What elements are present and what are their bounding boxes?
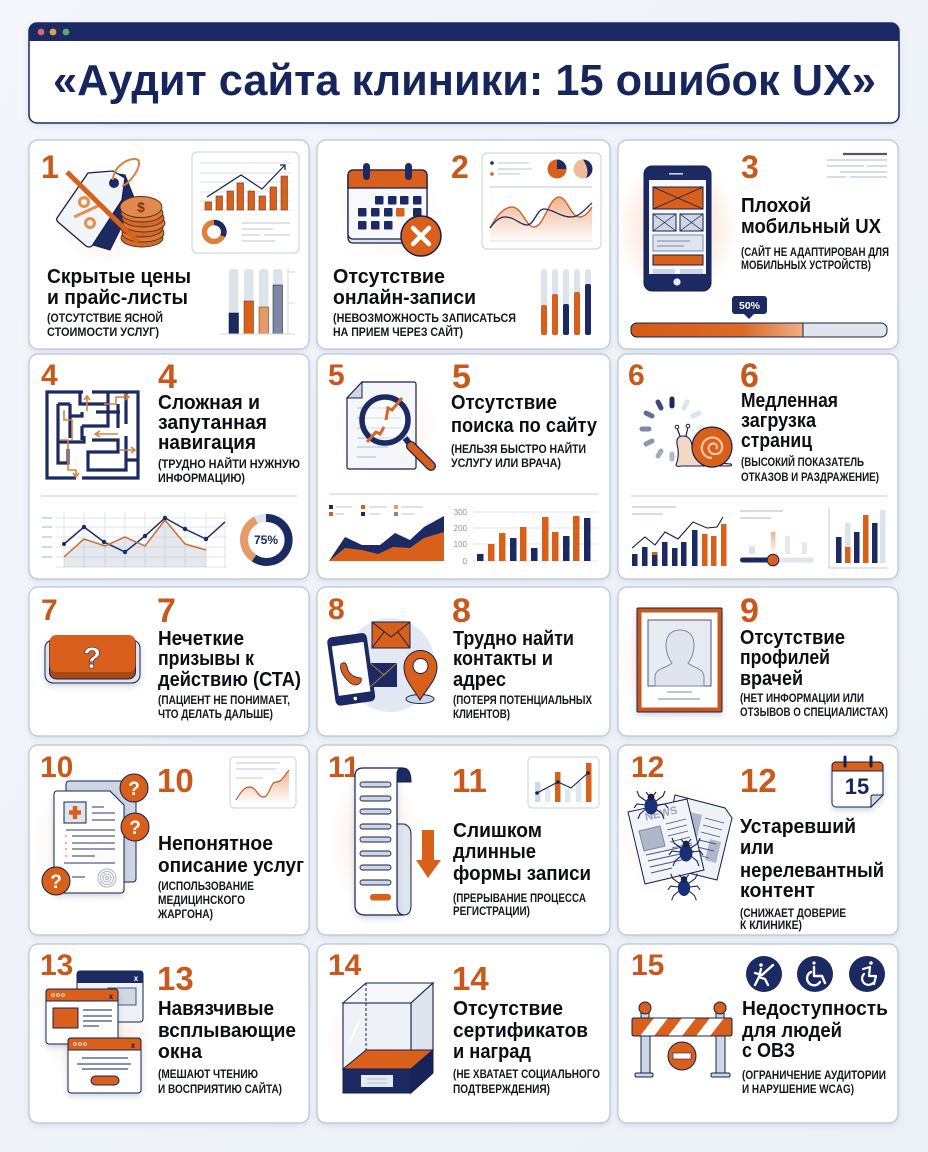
number 11 small: 11 [328, 751, 360, 784]
icon: accessibility badges [746, 956, 885, 992]
subtext: ИНФОРМАЦИЮ) [158, 471, 245, 485]
icon: medical document with question marks: ? [50, 872, 62, 893]
vertical bars chart [541, 269, 591, 335]
bar chart with axis: 300 [454, 508, 468, 517]
panel: 4 complex navigation [29, 354, 309, 579]
heading: всплывающие [158, 1020, 296, 1042]
heading: контакты и [453, 648, 553, 670]
heading: Отсутствие [451, 392, 557, 414]
heading: нерелевантный [740, 860, 884, 882]
subtext [741, 244, 889, 272]
subtext: ОТЗЫВОВ О СПЕЦИАЛИСТАХ) [740, 705, 888, 719]
heading: поиска по сайту [451, 415, 598, 437]
heading: страниц [741, 430, 813, 452]
heading: Трудно найти [453, 628, 574, 650]
subtext: К КЛИНИКЕ) [740, 918, 802, 932]
line chart [42, 512, 226, 568]
heading: Навязчивые [158, 998, 274, 1020]
panel: 5 no site search [317, 354, 610, 579]
icon: medical document with question marks [30, 774, 150, 900]
heading [158, 833, 304, 877]
header: browser window title banner [29, 23, 899, 123]
subtext: ЖАРГОНА) [157, 907, 213, 921]
subtext: ЧТО ДЕЛАТЬ ДАЛЬШЕ) [158, 707, 273, 721]
heading: действию (СТА) [158, 669, 301, 691]
progress bar 50% [631, 296, 887, 337]
title: «Аудит сайта клиники: 15 ошибок UX» [53, 56, 876, 105]
heading: с ОВЗ [742, 1040, 795, 1062]
mini dashboard: bar chart with donut [192, 152, 299, 253]
subtext: НА ПРИЕМ ЧЕРЕЗ САЙТ) [333, 324, 463, 339]
number 6 small: 6 [628, 359, 645, 392]
subtext: ПОДТВЕРЖДЕНИЯ) [453, 1082, 550, 1096]
heading: Сложная и [158, 392, 260, 414]
subtext [158, 456, 300, 485]
icon: long scroll form with arrow [330, 765, 441, 915]
panel: 14 no certificates [317, 944, 610, 1123]
icon: stacked popup windows: x [134, 974, 139, 983]
heading: длинные [453, 841, 536, 863]
icon: stacked popup windows [45, 971, 155, 1095]
icon: orange button with question mark: ? [83, 642, 101, 675]
number 5 small: 5 [328, 359, 345, 392]
subtext [740, 906, 846, 932]
icon: medical document with question marks: ? [129, 818, 141, 839]
heading [47, 266, 191, 309]
heading: окна [158, 1041, 203, 1063]
subtext [158, 693, 290, 721]
heading: Устаревший [740, 816, 856, 838]
subtext: (ОГРАНИЧЕНИЕ АУДИТОРИИ [742, 1068, 886, 1082]
heading: профилей [740, 647, 830, 669]
icon: newspapers with bugs [617, 782, 733, 900]
heading [740, 816, 884, 902]
panel: 3 poor mobile UX [615, 140, 898, 349]
icon: smartphone with wireframe [615, 156, 739, 300]
heading [741, 195, 882, 238]
legend [329, 505, 423, 516]
number 5 large: 5 [452, 358, 471, 396]
slider with bars [740, 511, 814, 566]
panel: 11 long booking forms [317, 745, 610, 935]
heading: формы записи [453, 863, 591, 885]
heading: Нечеткие [158, 628, 244, 650]
mini chart [528, 757, 599, 808]
mini bar chart [829, 507, 887, 568]
subtext: УСЛУГУ ИЛИ ВРАЧА) [451, 456, 561, 470]
subtext: (ИСПОЛЬЗОВАНИЕ [158, 879, 254, 893]
donut 75%: 75% [254, 533, 278, 547]
number 7 large: 7 [157, 592, 176, 630]
icon: calendar 15: 15 [845, 774, 869, 799]
number 10 large: 10 [157, 762, 194, 799]
number 1: 1 [41, 149, 59, 185]
heading: Непонятное [158, 833, 273, 855]
donut 75% [244, 518, 289, 562]
number 10 small: 10 [40, 751, 73, 784]
heading [740, 627, 845, 690]
heading [742, 998, 888, 1062]
heading: Скрытые цены [47, 266, 191, 288]
subtext: МЕДИЦИНСКОГО [158, 893, 245, 907]
heading: Плохой [741, 195, 811, 217]
subtext [451, 441, 586, 470]
subtext [157, 879, 254, 921]
icon: document with broken magnifier [333, 373, 437, 477]
number 12 large: 12 [740, 762, 777, 799]
heading: сертификатов [453, 1020, 588, 1042]
icon: empty portrait frame [615, 598, 722, 722]
number 3: 3 [741, 149, 759, 185]
heading [158, 392, 267, 454]
icon: price tags and coins [53, 159, 165, 267]
icon: orange button with question mark [45, 635, 140, 683]
text placeholder lines [827, 154, 887, 177]
bar chart with axis: 200 [454, 524, 468, 533]
heading: навигация [158, 432, 256, 454]
icon: stacked popup windows: x [109, 992, 114, 1001]
subtext: (ПРЕРЫВАНИЕ ПРОЦЕССА [453, 891, 586, 905]
bar chart with axis [454, 508, 598, 566]
subtext: (ТРУДНО НАЙТИ НУЖНУЮ [158, 456, 300, 471]
heading: запутанная [158, 412, 267, 434]
heading: контент [740, 880, 815, 902]
subtext: (ОТСУТСТВИЕ ЯСНОЙ [47, 310, 163, 325]
number 13 small: 13 [40, 949, 73, 982]
subtext: СТОИМОСТИ УСЛУГ) [47, 325, 159, 339]
number 14 small: 14 [328, 949, 362, 982]
number 12 small: 12 [631, 751, 664, 784]
heading [453, 998, 588, 1063]
subtext: И ВОСПРИЯТИЮ САЙТА) [158, 1081, 282, 1096]
heading [333, 266, 476, 309]
heading: Слишком [453, 820, 542, 842]
bar chart with axis: 0 [463, 557, 468, 566]
subtext [453, 693, 592, 721]
mini chart [230, 757, 296, 808]
progress bars chart [219, 268, 295, 334]
subtext: РЕГИСТРАЦИИ) [453, 904, 530, 918]
heading: для людей [742, 1020, 842, 1042]
icon: stacked popup windows: x [131, 1041, 136, 1050]
subtext [742, 1068, 886, 1096]
panel: 7 unclear CTA [29, 587, 309, 736]
subtext [741, 454, 879, 484]
subtext: (ПОТЕРЯ ПОТЕНЦИАЛЬНЫХ [453, 693, 592, 707]
number 14 large: 14 [452, 960, 489, 997]
icon: phone envelopes pin [327, 618, 437, 712]
mini bars with trend line [632, 507, 726, 566]
bar chart with axis: 100 [454, 540, 468, 549]
number 7 small: 7 [41, 594, 58, 627]
subtext [333, 311, 516, 339]
panel: 1 hidden prices [29, 140, 309, 349]
heading [453, 628, 574, 691]
subtext: (САЙТ НЕ АДАПТИРОВАН ДЛЯ [741, 244, 889, 259]
panel: 13 intrusive popups [29, 944, 309, 1123]
number 8 large: 8 [452, 592, 471, 630]
icon: empty display case [325, 983, 433, 1093]
mini dashboard: line chart and pies [482, 153, 601, 249]
panel: 6 slow loading [618, 354, 898, 579]
heading [158, 998, 296, 1063]
icon: price tags and coins: $ [137, 199, 145, 215]
panel: 15 inaccessibility [618, 944, 898, 1123]
heading: или [740, 837, 774, 859]
subtext: (НЕВОЗМОЖНОСТЬ ЗАПИСАТЬСЯ [333, 311, 516, 325]
heading: Медленная [741, 390, 838, 412]
heading: Отсутствие [453, 998, 563, 1020]
number 15: 15 [631, 949, 664, 982]
subtext [740, 691, 888, 719]
icon: newspapers with bugs: NEWS [644, 805, 679, 824]
number 11 large: 11 [452, 762, 487, 799]
number 13 large: 13 [157, 960, 194, 997]
heading: Отсутствие [740, 627, 845, 649]
icon: medical document with question marks: ? [128, 779, 140, 800]
heading [453, 820, 591, 885]
icon: maze with arrows [47, 392, 138, 478]
heading: загрузка [741, 410, 817, 432]
panel: 10 unclear service descriptions [29, 745, 309, 935]
subtext [453, 1067, 600, 1096]
heading: адрес [453, 669, 506, 691]
number 4 large: 4 [158, 358, 177, 396]
heading: врачей [740, 668, 803, 690]
subtext: (ПАЦИЕНТ НЕ ПОНИМАЕТ, [158, 693, 290, 707]
subtext: МОБИЛЬНЫХ УСТРОЙСТВ) [741, 257, 871, 272]
number 8 small: 8 [328, 593, 345, 626]
heading: Отсутствие [333, 266, 445, 288]
number 6 large: 6 [740, 357, 759, 395]
number 9: 9 [740, 592, 759, 630]
heading: и прайс-листы [47, 287, 188, 309]
subtext: (МЕШАЮТ ЧТЕНИЮ [158, 1067, 258, 1081]
subtext [47, 310, 163, 339]
subtext: (НЕ ХВАТАЕТ СОЦИАЛЬНОГО [453, 1067, 600, 1081]
stacked area chart [329, 516, 444, 561]
heading: мобильный UX [741, 216, 882, 238]
subtext: (НЕТ ИНФОРМАЦИИ ИЛИ [740, 691, 864, 705]
subtext: (СНИЖАЕТ ДОВЕРИЕ [740, 906, 846, 920]
panel: 2 no online booking [317, 140, 610, 349]
heading: и наград [453, 1041, 531, 1063]
subtext: И НАРУШЕНИЕ WCAG) [742, 1082, 854, 1096]
subtext: (НЕЛЬЗЯ БЫСТРО НАЙТИ [451, 441, 586, 456]
icon: calendar 15 [832, 757, 883, 807]
icon: loading spinner and snail [642, 399, 732, 467]
heading [741, 390, 838, 452]
panel: 9 no doctor profiles [615, 587, 898, 736]
number 4 small: 4 [41, 359, 58, 392]
subtext: КЛИЕНТОВ) [453, 707, 510, 721]
subtext [158, 1067, 282, 1096]
subtext: ОТКАЗОВ И РАЗДРАЖЕНИЕ) [741, 470, 879, 484]
heading: Недоступность [742, 998, 888, 1020]
heading: описание услуг [158, 855, 304, 877]
panel: 8 hard to find contacts [317, 587, 610, 736]
heading: призывы к [158, 648, 255, 670]
subtext: (ВЫСОКИЙ ПОКАЗАТЕЛЬ [741, 454, 864, 469]
heading: онлайн-записи [333, 287, 476, 309]
number 2: 2 [451, 149, 469, 185]
progress bar 50%: 50% [739, 300, 761, 312]
heading [158, 628, 301, 691]
heading [451, 392, 598, 437]
subtext [453, 891, 586, 918]
panel: 12 outdated content [617, 745, 898, 935]
icon: calendar with cross [336, 156, 441, 260]
icon: road barrier with no-entry sign [632, 1002, 732, 1077]
